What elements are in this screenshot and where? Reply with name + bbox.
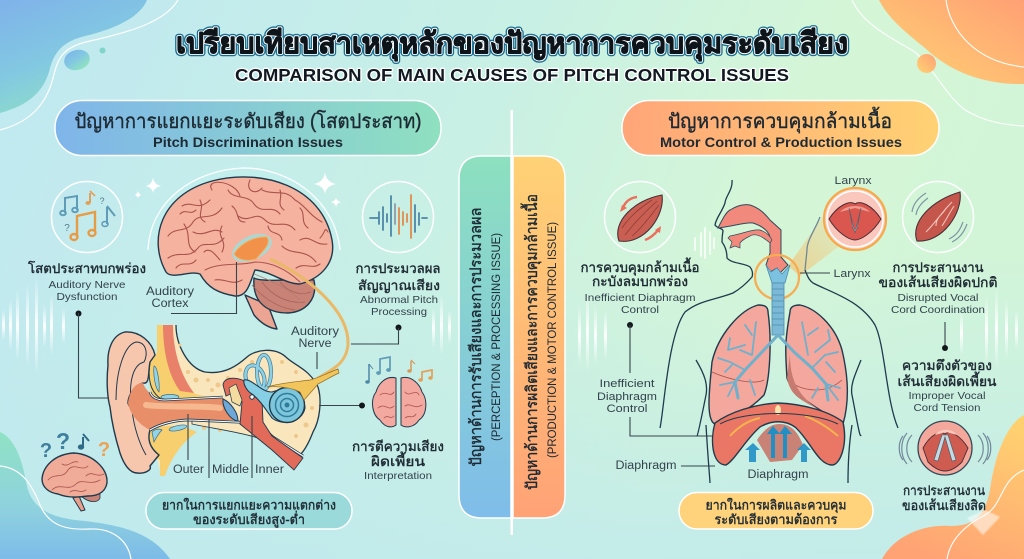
label: inefficient diaphragm control: Inefficient Diaphragm — [584, 292, 696, 304]
label: disrupted vocal cord coordination: การประสานงาน — [892, 260, 984, 275]
illustration: ear anatomy — [107, 325, 339, 476]
label: ear sections: Outer — [173, 464, 204, 476]
icon: vocal cords with vibration — [899, 421, 991, 475]
label: abnormal pitch processing: สัญญาณเสียง — [358, 278, 440, 293]
illustration: larynx ring on body — [755, 255, 799, 299]
label: inefficient diaphragm control side: Diaphragm — [597, 391, 657, 403]
label: ear sections — [173, 464, 284, 476]
illustration: upper body outline — [660, 180, 898, 483]
label: auditory nerve — [291, 326, 339, 369]
illustration: auditory nerve fibre — [270, 259, 348, 378]
illustration: larynx close-up: Larynx — [834, 175, 872, 187]
label: disrupted vocal cord coordination: Disrupted Vocal — [898, 292, 978, 304]
label: inefficient diaphragm control: กะบังลมบกพร่อง — [592, 274, 688, 289]
label: abnormal pitch processing: Abnormal Pitch — [360, 294, 438, 306]
label: vocal cord coordination: การประสานงาน — [903, 483, 985, 498]
label: disrupted vocal cord coordination: ของเส้นเสียงผิดปกติ — [878, 275, 998, 290]
decorative sound waves — [2, 278, 1018, 373]
label: diaphragm left: Diaphragm — [616, 460, 676, 472]
center panel: perception column — [459, 156, 511, 518]
label: inefficient diaphragm control — [580, 257, 700, 316]
label: inefficient diaphragm control: Control — [621, 304, 659, 316]
label: ear sections: Middle — [212, 464, 249, 476]
center panel: production column: (PRODUCTION & MOTOR CONTROL ISSUE) — [547, 222, 559, 458]
label: auditory cortex: Cortex — [152, 298, 189, 310]
label: auditory nerve: Nerve — [298, 338, 332, 350]
callout: left summary — [146, 492, 352, 529]
leader line: vocal coordination — [942, 322, 948, 351]
center divider line — [510, 110, 513, 535]
callout: left summary: ของระดับเสียงสูง-ต่ำ — [193, 511, 305, 528]
label: larynx side: Larynx — [834, 268, 871, 280]
label: improper vocal cord tension — [898, 358, 996, 414]
left heading pill: ปัญหาการแยกแยะระดับเสียง (โสตประสาท) — [74, 110, 422, 133]
callout: left summary: ยากในการแยกแยะความแตกต่าง — [162, 498, 336, 512]
icon: diaphragm muscle — [604, 182, 676, 252]
leader line: diaphragm control lower — [630, 417, 722, 436]
icon: confused brain: ? — [56, 428, 70, 454]
label: abnormal pitch processing: Processing — [371, 306, 427, 318]
label: inefficient diaphragm control: การควบคุมกล้ามเนื้อ — [580, 257, 700, 276]
label: auditory nerve dysfunction — [28, 260, 146, 303]
icon: confused music notes — [52, 182, 122, 252]
subtitle: COMPARISON OF MAIN CAUSES OF PITCH CONTROL ISSUES — [235, 65, 789, 85]
label: interpretation — [352, 439, 444, 482]
label: interpretation: การตีความเสียง — [352, 439, 444, 454]
label: vocal cord coordination: ของเส้นเสียงสิด — [902, 498, 986, 513]
icon: confused brain: ? — [98, 439, 110, 461]
illustration: diaphragm with airflow arrows — [713, 403, 845, 465]
label: disrupted vocal cord coordination — [878, 260, 998, 316]
center panel: perception column: (PERCEPTION & PROCESSING ISSUE) — [491, 233, 503, 441]
illustration: lungs and bronchi — [709, 283, 847, 424]
label: improper vocal cord tension: Improper Vocal — [908, 390, 986, 402]
icon: sparkles — [135, 172, 341, 207]
label: auditory cortex: Auditory — [146, 286, 194, 298]
label: auditory nerve: Auditory — [291, 326, 339, 338]
icon: two-hemisphere brain with notes — [365, 357, 433, 427]
icon: confused music notes: ? — [99, 196, 105, 206]
leader line: diaphragm control upper — [627, 322, 633, 373]
label: inefficient diaphragm control side — [597, 378, 657, 415]
icon: sound wave — [362, 182, 434, 252]
icon: voice waves near mouth — [695, 228, 714, 258]
label: auditory nerve dysfunction: Auditory Nerve — [48, 279, 126, 291]
title: เปรียบเทียบสาเหตุหลักของปัญหาการควบคุมระดับเสียง — [176, 28, 848, 61]
label: diaphragm below: Diaphragm — [748, 469, 808, 481]
label: ear sections: Inner — [255, 464, 284, 476]
callout: right summary: ระดับเสียงตามต้องการ — [714, 512, 838, 527]
illustration: larynx close-up — [824, 175, 886, 250]
illustration: brain with auditory cortex — [148, 168, 340, 329]
center panel: production column: ปัญหาด้านการผลิตเสียงและการควบคุมกล้ามเนื้อ — [520, 194, 542, 490]
label: improper vocal cord tension: ความตึงตัวของ — [902, 358, 992, 373]
icon: confused brain — [40, 428, 110, 511]
zoom cone — [788, 212, 842, 276]
label: inefficient diaphragm control side: Inefficient — [600, 378, 654, 390]
center panel: perception column: ปัญหาด้านการรับเสียงและการประมวลผล — [468, 208, 485, 466]
label: larynx side — [800, 268, 871, 280]
label: abnormal pitch processing — [356, 261, 440, 318]
illustration: oral and nasal cavity — [718, 205, 788, 273]
label: improper vocal cord tension: Cord Tension — [914, 402, 981, 414]
decorative blob: bottom left — [0, 432, 170, 559]
label: improper vocal cord tension: เส้นเสียงผิดเพี้ยน — [898, 371, 996, 389]
decorative blob: top right — [852, 0, 1024, 126]
right heading pill — [622, 100, 939, 156]
label: diaphragm left — [616, 460, 715, 472]
leader line: interpretation — [319, 402, 365, 408]
decorative blob: bottom right — [882, 415, 1024, 559]
icon: confused brain: ? — [40, 440, 52, 462]
decorative blob: top left — [0, 0, 178, 130]
label: vocal cord coordination — [902, 483, 986, 513]
callout: right summary: ยากในการผลิตและควบคุม — [706, 498, 846, 514]
label: abnormal pitch processing: การประมวลผล — [356, 261, 440, 276]
label: auditory nerve dysfunction: โสตประสาทบกพร่อง — [28, 260, 146, 276]
label: auditory nerve dysfunction: Dysfunction — [56, 291, 118, 303]
center panel: production column — [513, 156, 565, 518]
right heading pill: Motor Control & Production Issues — [660, 135, 902, 150]
label: disrupted vocal cord coordination: Cord Coordination — [891, 304, 985, 316]
label: inefficient diaphragm control side: Control — [606, 403, 648, 415]
icon: vibrating vocal muscle — [902, 182, 974, 252]
title: เปรียบเทียบสาเหตุหลักของปัญหาการควบคุมระดับเสียง — [176, 28, 848, 61]
right heading pill: ปัญหาการควบคุมกล้ามเนื้อ — [668, 107, 892, 134]
label: interpretation: ผิดเพี้ยน — [371, 451, 425, 469]
leader lines: outer middle inner — [188, 414, 252, 478]
label: auditory cortex — [146, 286, 194, 310]
title: เปรียบเทียบสาเหตุหลักของปัญหาการควบคุมระดับเสียง — [176, 28, 848, 61]
label: interpretation: Interpretation — [364, 470, 432, 482]
leader line: abnormal processing — [351, 324, 402, 344]
icon: confused music notes: ? — [64, 223, 70, 234]
callout: right summary — [679, 492, 873, 529]
leader line: auditory nerve dysfunction — [76, 310, 116, 398]
leader line: auditory cortex — [171, 262, 236, 314]
left heading pill — [55, 100, 441, 156]
left heading pill: Pitch Discrimination Issues — [153, 135, 343, 150]
